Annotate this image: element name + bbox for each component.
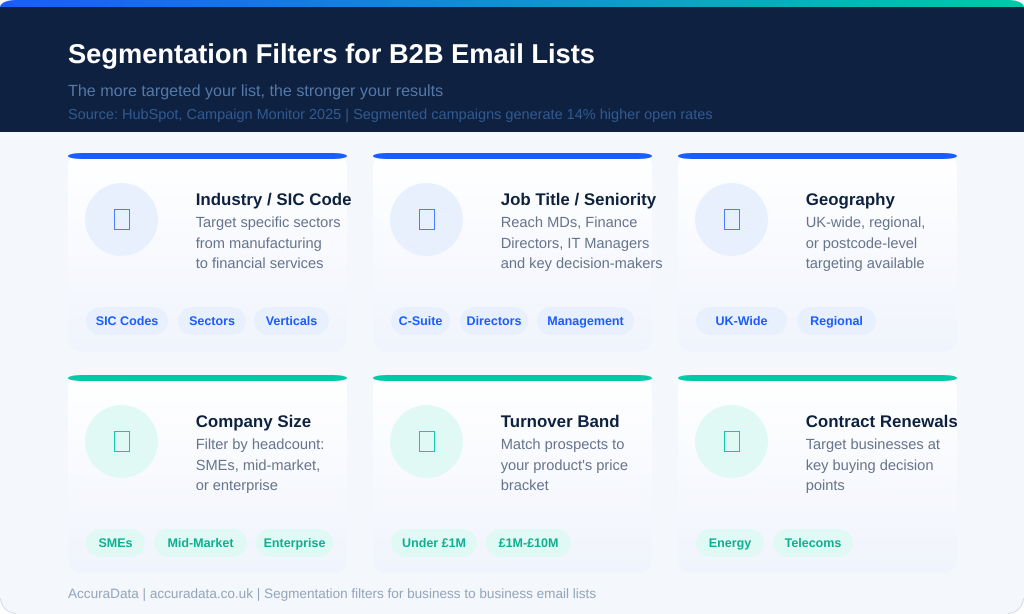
tag: Under £1M: Under £1M <box>402 536 466 550</box>
text: contract description: Target businesses at <box>806 437 940 453</box>
tag: Telecoms <box>773 529 853 557</box>
tag: Regional: Regional <box>810 314 863 328</box>
tag: Regional <box>797 307 876 335</box>
panel: Geography <box>678 153 957 352</box>
heading: Industry / SIC Code: Industry / SIC Code <box>196 190 351 209</box>
tag: Directors <box>460 307 528 335</box>
icon: company size placeholder <box>85 405 158 478</box>
icon: turnover placeholder <box>390 405 463 478</box>
panel: Contract Renewals <box>678 375 957 574</box>
tag: Telecoms: Telecoms <box>785 536 841 550</box>
tag: SMEs: SMEs <box>98 536 133 550</box>
top gradient bar <box>0 0 1024 7</box>
text: job title description: Reach MDs, Finance <box>501 215 637 231</box>
text: industry description: to financial services <box>196 256 323 272</box>
heading: Turnover Band: Turnover Band <box>501 412 620 431</box>
tag: Mid-Market <box>154 529 247 557</box>
tag: Sectors: Sectors <box>189 314 235 328</box>
text: industry description: from manufacturing <box>196 236 322 252</box>
text: geography description: or postcode-level <box>806 236 917 252</box>
tag: Enterprise <box>256 529 333 557</box>
panel: Job Title / Seniority <box>373 153 652 352</box>
text: industry description: Target specific sectors <box>196 215 341 231</box>
text: job title description: Directors, IT Managers <box>501 236 649 252</box>
tag: SIC Codes: SIC Codes <box>96 314 158 328</box>
text: geography description: targeting available <box>806 256 925 272</box>
text: company size description <box>196 437 324 494</box>
panel: Turnover Band <box>373 375 652 574</box>
heading: Contract Renewals: Contract Renewals <box>806 412 958 431</box>
tag: Verticals: Verticals <box>266 314 317 328</box>
heading: Company Size: Company Size <box>196 412 311 431</box>
text: geography description <box>806 215 925 272</box>
tag: SMEs <box>86 529 145 557</box>
text: turnover description: bracket <box>501 478 549 494</box>
tag: Sectors <box>178 307 246 335</box>
tag: Mid-Market: Mid-Market <box>168 536 233 550</box>
tag: Enterprise: Enterprise <box>264 536 325 550</box>
icon: geography placeholder <box>695 183 768 256</box>
text: company size description: or enterprise <box>196 478 278 494</box>
text: contract description <box>806 437 940 494</box>
text: company size description: Filter by headcount: <box>196 437 324 453</box>
text: job title description <box>501 215 663 272</box>
tag: UK-Wide <box>696 307 787 335</box>
tag: C-Suite: C-Suite <box>399 314 442 328</box>
text: turnover description <box>500 437 628 494</box>
tag: Management <box>537 307 634 335</box>
tag: Verticals <box>254 307 329 335</box>
icon: contract placeholder <box>695 405 768 478</box>
text: turnover description: your product's price <box>501 458 628 474</box>
text: contract description: key buying decision <box>806 458 933 474</box>
tag: Directors: Directors <box>467 314 521 328</box>
source line: Source: HubSpot, Campaign Monitor 2025 | Segmented campaigns generate 14% higher open rates <box>68 107 713 123</box>
text: contract description: points <box>806 478 845 494</box>
heading: Geography: Geography <box>806 190 895 209</box>
text: geography description: UK-wide, regional, <box>806 215 925 231</box>
text: job title description: and key decision-makers <box>501 256 663 272</box>
tag: UK-Wide: UK-Wide <box>716 314 767 328</box>
tag: £1M-£10M: £1M-£10M <box>499 536 558 550</box>
footer: AccuraData | accuradata.co.uk | Segmentation filters for business to business email lists <box>68 586 596 601</box>
header band <box>0 7 1024 132</box>
panel: Company Size <box>68 375 347 574</box>
icon: job title placeholder <box>390 183 463 256</box>
tag: Under £1M <box>391 529 477 557</box>
tag: SIC Codes <box>86 307 168 335</box>
subtitle: The more targeted your list, the stronger your results <box>68 82 443 100</box>
text: turnover description: Match prospects to <box>501 437 624 453</box>
tag: Management: Management <box>547 314 624 328</box>
tag: Energy: Energy <box>709 536 751 550</box>
tag: £1M-£10M <box>486 529 571 557</box>
tag: Energy <box>696 529 764 557</box>
icon: industry placeholder <box>85 183 158 256</box>
title: Segmentation Filters for B2B Email Lists <box>68 38 595 69</box>
text: company size description: SMEs, mid-market, <box>196 458 320 474</box>
tag: C-Suite <box>391 307 450 335</box>
panel: Industry / SIC Code <box>68 153 347 352</box>
heading: Job Title / Seniority: Job Title / Seniority <box>501 190 656 209</box>
text: industry description <box>196 215 341 272</box>
